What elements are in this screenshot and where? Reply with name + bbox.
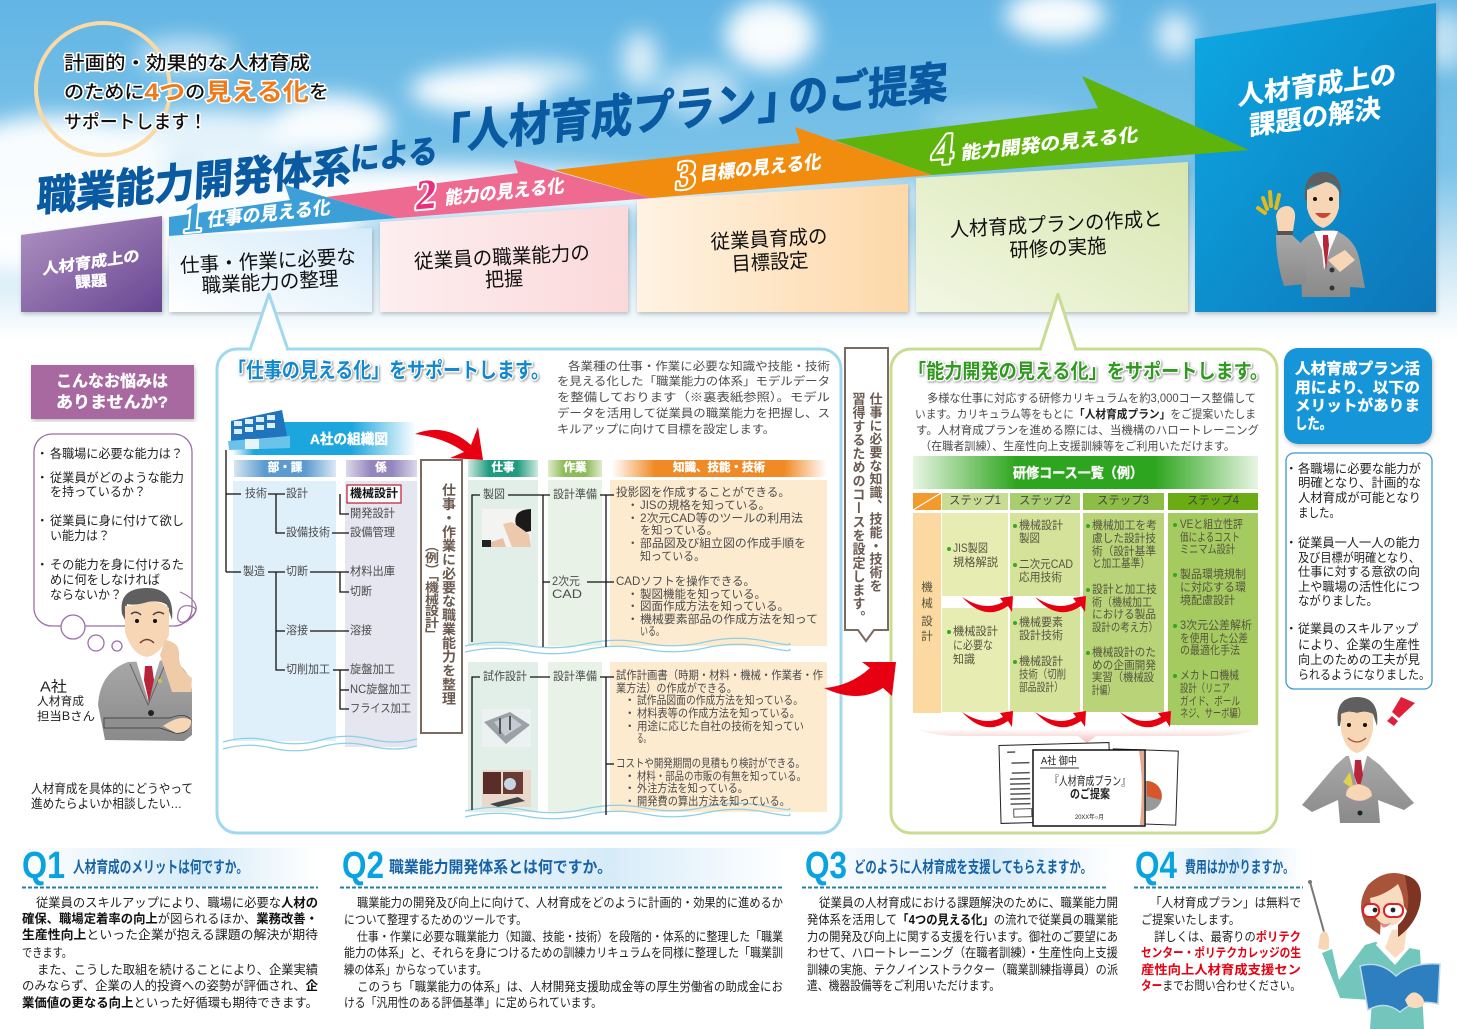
course table: ミニマム設計 — [1180, 542, 1235, 556]
course table: JIS製図 — [953, 541, 988, 555]
course table: 術（機械加工 — [1092, 595, 1152, 609]
panel: box 4: 人材育成プランの作成と — [949, 207, 1163, 242]
course table: 慮した設計技 — [1092, 531, 1156, 545]
panel: box 3: 従業員育成の — [710, 225, 828, 254]
section: Q1: 従業員のスキルアップにより、職場に必要な人材の — [36, 895, 318, 910]
table title band — [913, 456, 1258, 489]
course table: 技術（切削 — [1019, 667, 1066, 681]
org chart header: A社の組織図 — [310, 431, 388, 447]
step headers: ステップ2 — [1019, 494, 1071, 507]
panel: box 4 — [916, 162, 1188, 312]
text block: job visualization description: データを活用して従業員の職業能力を把握し、ス — [557, 406, 830, 420]
text block: capability description: います。カリキュラム等をもとに「人材育成プラン」をご提案いたしま — [915, 407, 1256, 421]
panel: merits list: ・ — [1285, 536, 1298, 550]
course table: 計 — [921, 629, 933, 643]
course table: 実習（機械設 — [1092, 670, 1154, 684]
panel: merits list: 人材育成が可能となり — [1298, 490, 1421, 505]
panel: right capability development — [891, 294, 1277, 833]
course table: 機 — [921, 581, 933, 594]
panel: box 1 — [169, 228, 372, 312]
step headers — [942, 493, 1258, 510]
skills table: ・ — [624, 708, 636, 720]
skills table: JISの規格を知っている。 — [640, 498, 770, 512]
skills table: CADソフトを操作できる。 — [616, 574, 755, 588]
section: Q2: このうち「職業能力の体系」は、人材開発支援助成金等の厚生労働省の助成金にお — [357, 979, 783, 994]
panel: box 4: 研修の実施 — [1009, 234, 1107, 263]
title: 人材育成プラン — [467, 77, 757, 157]
panel: issue box purple: 課題 — [74, 272, 108, 292]
skills table: 製図 — [483, 487, 505, 501]
column header: section — [346, 460, 417, 477]
skills table: を知っている。 — [640, 523, 718, 537]
panel: merits list: ・ — [1285, 622, 1298, 636]
photo: machine — [482, 709, 531, 747]
panel: merits list: 上や職場の活性化につ — [1298, 580, 1420, 594]
column header: job — [468, 460, 538, 477]
section: Q4: 産性向上人材育成支援セン — [1141, 962, 1301, 977]
skills table: 機械要素部品の作成方法を知って — [640, 612, 818, 626]
arrow: red curved table to course list — [824, 662, 896, 696]
photo: drafting — [482, 509, 531, 547]
callout: vertical course label with down arrow: 習得するためのコースを設定します。 — [850, 392, 866, 624]
course table: に必要な — [953, 639, 993, 652]
skills table: 投影図を作成することができる。 — [616, 485, 790, 499]
course table: 設計の考え方） — [1092, 620, 1158, 634]
panel: box 2: 把握 — [484, 267, 524, 292]
course table: 設計（リニア — [1180, 681, 1230, 695]
arrow: pink step 2: 能力の見える化 — [444, 176, 566, 208]
callout: vertical organize label: （例）「機械設計」 — [424, 540, 440, 640]
column header: job: 仕事 — [492, 460, 515, 474]
thought bubble: ・ — [36, 471, 49, 485]
panel: box 1: 職業能力の整理 — [201, 267, 339, 298]
course table: 製図 — [1019, 531, 1040, 545]
icon: worried man — [98, 588, 196, 741]
sky background with clouds — [0, 0, 1457, 340]
section: Q3: 発体系を活用して「4つの見える化」の流れで従業員の職業能 — [807, 912, 1118, 927]
course table: における製品 — [1092, 607, 1156, 621]
skills table: ・ — [624, 721, 636, 733]
arrow: red curved org to table — [415, 427, 483, 460]
course table: 機械設計 — [1019, 518, 1063, 532]
arrow: pink step 2 — [326, 160, 652, 220]
course table: 応用技術 — [1019, 570, 1062, 584]
section: Q4: ターまでお問い合わせください。 — [1141, 979, 1301, 993]
documents: training plan proposal — [999, 743, 1178, 826]
course table: 機械加工を考 — [1092, 518, 1157, 532]
skills table: ・ — [624, 771, 636, 783]
skills table: 設計準備 — [553, 487, 597, 501]
course table: 二次元CAD — [1019, 558, 1073, 571]
label: person name: 担当Bさん — [37, 709, 95, 723]
thought bubble: ・ — [36, 447, 49, 461]
org chart: 技術 — [245, 486, 267, 500]
panel: merits list — [1285, 453, 1432, 689]
column header: knowledge — [612, 460, 827, 477]
section: Q4: ご提案いたします。 — [1141, 912, 1240, 927]
thought bubble: ・ — [36, 558, 49, 572]
callout: vertical organize label — [421, 460, 462, 733]
org chart: 設備管理 — [350, 525, 395, 539]
title: 」 — [757, 73, 805, 129]
section: Q1: 人材育成のメリットは何ですか。 — [73, 858, 248, 876]
panel: merits list: ・ — [1285, 462, 1298, 476]
arrow: green step 4 — [834, 76, 1249, 175]
org chart: 切断 — [350, 585, 372, 598]
documents: training plan proposal: 『人材育成プラン』 — [1050, 773, 1130, 788]
panel: merits list: 仕事に対する意欲の向 — [1298, 564, 1420, 579]
panel: solution box: 課題の解決 — [1249, 93, 1381, 141]
course table: 規格解説 — [953, 555, 998, 569]
title: 職業能力開発体系 — [36, 143, 352, 221]
text block: job visualization description: を整備しております（※裏表紙参照）。モデル — [557, 390, 830, 404]
course table: 設計技術 — [1019, 628, 1063, 642]
thought bubble: ・ — [36, 514, 49, 528]
icon: woman with pointer and book — [1308, 873, 1440, 1029]
course table: めの企画開発 — [1092, 658, 1156, 672]
section: Q2: 職業能力開発体系とは何ですか。 — [389, 858, 612, 876]
section: Q3: Q3 — [805, 845, 847, 887]
column header: knowledge: 知識、技能・技術 — [673, 460, 765, 474]
skills table: る。 — [637, 733, 650, 745]
course table: メカトロ機械 — [1180, 668, 1239, 682]
text block: capability description: す。人材育成プランを進める際には、当機構のハロートレーニング — [916, 423, 1259, 437]
title — [36, 59, 949, 221]
title: による — [349, 133, 439, 177]
panel: box 3 — [637, 184, 908, 312]
skills table: 2次元 — [552, 575, 580, 588]
callout: vertical course label with down arrow — [845, 348, 888, 641]
course table: 計編） — [1092, 683, 1115, 697]
section: Q3: どのように人材育成を支援してもらえますか。 — [854, 858, 1092, 876]
section: Q3: わせて、ハロートレーニング（在職者訓練）・生産性向上支援 — [807, 945, 1118, 960]
org chart: 溶接 — [350, 624, 372, 637]
section: Q4: センター・ポリテクカレッジの生 — [1141, 945, 1301, 960]
thought bubble: を持っているか？ — [50, 484, 146, 499]
panel: solution box — [1195, 3, 1436, 312]
section: Q4: Q4 — [1135, 845, 1177, 887]
panel: merits list: ながりました。 — [1298, 593, 1378, 608]
panel: left heading worries: ありませんか? — [56, 394, 168, 412]
org chart: 材料出庫 — [350, 564, 395, 578]
course table: 機械設計のた — [1092, 645, 1156, 659]
section: Q3: 訓練の実施、テクノインストラクター（職業訓練指導員）の派 — [807, 962, 1118, 977]
skills table: コストや開発期間の見積もり検討ができる。 — [616, 756, 805, 770]
heading: job visualization: 「仕事の見える化」をサポートします。 — [228, 358, 549, 382]
lead text with orange circle: サポートします！ — [64, 112, 207, 132]
panel: merits heading: 人材育成プラン活 — [1295, 360, 1420, 378]
column header: department: 部・課 — [268, 460, 303, 474]
section: Q2: 仕事・作業に必要な職業能力（知識、技能・技術）を段階的・体系的に整理した「職業 — [357, 929, 783, 944]
skills table: 開発費の算出方法を知っている。 — [637, 794, 790, 808]
thought bubble: 各職場に必要な能力は？ — [50, 446, 183, 461]
course table: 機械設計 — [953, 624, 998, 638]
skills table: ・ — [627, 513, 638, 525]
section: Q1: 確保、職場定着率の向上が図られるほか、業務改善・ — [22, 911, 318, 926]
course table: 設計と加工技 — [1092, 582, 1157, 596]
skills table: 業方法）の作成ができる。 — [616, 681, 737, 695]
org chart: 開発設計 — [350, 506, 395, 520]
panel: solution box: 人材育成上の — [1238, 59, 1396, 111]
column header: department — [234, 460, 336, 477]
panel: merits list: られるようになりました。 — [1298, 668, 1430, 682]
skills table: CAD — [552, 589, 582, 601]
panel: box 1: 仕事・作業に必要な — [179, 245, 356, 278]
skills table: ・ — [627, 538, 638, 550]
section: Q2: 能力の体系」と、それらを身につけるための訓練カリキュラムを同様に整理した「職業訓 — [344, 945, 783, 960]
arrow: orange step 3 — [554, 127, 932, 198]
step headers: ステップ3 — [1097, 494, 1149, 507]
table title band: 研修コース一覧（例） — [1013, 465, 1143, 481]
course table: と加工基準） — [1092, 556, 1150, 570]
course table: 機械要素 — [1019, 615, 1063, 629]
skills table: 試作計画書（時期・材料・機械・作業者・作 — [616, 668, 823, 682]
course table: 機械設計 — [1019, 654, 1063, 668]
label: person name — [37, 678, 95, 723]
panel: merits list: 従業員のスキルアップ — [1298, 621, 1418, 636]
text block: capability description: （在職者訓練）、生産性向上支援訓練等をご利用いただけます。 — [920, 439, 1235, 453]
panel: merits list: 従業員一人一人の能力 — [1298, 535, 1420, 550]
icon: building — [228, 410, 290, 450]
arrow: blue step 1 — [169, 185, 398, 243]
section: Q1: できます。 — [22, 946, 72, 960]
skills table: ・ — [624, 695, 636, 707]
skills table: 設計準備 — [553, 669, 597, 683]
org chart: フライス加工 — [350, 702, 411, 715]
panel: merits heading: した。 — [1295, 416, 1332, 432]
skills table: 図面作成方法を知っている。 — [640, 599, 789, 613]
photo: cad screens — [482, 770, 531, 807]
documents: training plan proposal: のご提案 — [1070, 786, 1110, 801]
section: Q1: のみならず、企業の人的投資への姿勢が評価され、企 — [22, 978, 318, 993]
org chart: 製造 — [243, 564, 265, 578]
skills table: 用途に応じた自社の技術を知ってい — [637, 719, 804, 733]
arrow: blue step 1: 1 — [180, 193, 206, 243]
panel: merits list: 明確となり、計画的な — [1298, 475, 1421, 490]
org chart: 設備技術 — [286, 525, 330, 539]
panel: merits heading: 用により、以下の — [1295, 380, 1420, 396]
section: Q3: 力の開発及び向上に関する支援を行います。御社のご要望にあ — [807, 929, 1118, 944]
step headers: ステップ1 — [949, 494, 1001, 507]
panel: merits list: ました。 — [1298, 506, 1340, 520]
section: Q1 — [20, 845, 319, 1010]
thought bubble: い能力は？ — [50, 528, 110, 543]
arrow: orange step 3: 3 — [674, 152, 698, 198]
panel: issue box purple — [21, 216, 162, 312]
section: Q4: 「人材育成プラン」は無料で — [1150, 895, 1301, 910]
section: Q4 — [1134, 845, 1304, 993]
skills table: ・ — [624, 796, 636, 808]
panel: left heading worries — [31, 365, 194, 419]
section: Q1: また、こうした取組を続けることにより、企業実績 — [37, 962, 318, 977]
thought bubble: ならないか？ — [50, 588, 122, 602]
section: Q3: 遣、機器設備等をご利用いただけます。 — [807, 978, 1000, 993]
panel: left job visualization — [217, 294, 841, 833]
panel: box 2: 従業員の職業能力の — [413, 241, 590, 274]
panel: box 2 — [380, 206, 628, 312]
panel: merits list: 向上のための工夫が見 — [1298, 652, 1420, 667]
course table: 部品設計） — [1019, 680, 1063, 694]
text block: job visualization description: キルアップに向けて目標を設定します。 — [557, 422, 775, 436]
label: person name: 人材育成 — [37, 694, 85, 708]
text block: job visualization description: を見える化した「職業能力の体系」モデルデータ — [557, 374, 830, 388]
org chart: NC旋盤加工 — [350, 682, 411, 696]
panel: left heading worries: こんなお悩みは — [56, 372, 168, 390]
title: のご提案 — [787, 59, 949, 123]
title: 「 — [423, 109, 471, 165]
lead text with orange circle: 計画的・効果的な人材育成 — [64, 52, 310, 74]
skills table: 材料・部品の市販の有無を知っている。 — [637, 769, 806, 783]
course table: ネジ、サーボ編） — [1180, 707, 1246, 720]
documents: training plan proposal: A社 御中 — [1041, 754, 1077, 767]
org chart: 設計 — [286, 486, 308, 500]
thought bubble: 従業員に身に付けて欲し — [50, 513, 184, 528]
section: Q3 — [802, 845, 1118, 993]
skills table: ・ — [627, 500, 638, 512]
course table: を使用した公差 — [1180, 631, 1248, 645]
arrow: green step 4: 4 — [930, 123, 956, 175]
course table: ガイド、ボール — [1180, 695, 1240, 708]
column header: task: 作業 — [564, 460, 587, 474]
course table: 製品環境規制 — [1180, 567, 1246, 581]
skills table: 外注方法を知っている。 — [637, 781, 748, 795]
section: Q1: Q1 — [22, 845, 65, 887]
section: Q2: 練の体系」からなっています。 — [344, 963, 487, 977]
skills table: 試作設計 — [483, 669, 527, 683]
column header: task — [548, 460, 602, 477]
course table: 3次元公差解析 — [1180, 618, 1252, 632]
thought bubble — [34, 434, 192, 651]
lead text with orange circle — [36, 23, 329, 155]
panel: merits heading — [1284, 348, 1432, 444]
org chart: 切削加工 — [286, 662, 330, 676]
thought bubble: その能力を身に付けるた — [50, 557, 184, 572]
column header: section: 係 — [375, 460, 387, 474]
panel: merits list: により、企業の生産性 — [1298, 637, 1420, 652]
section: Q2: 職業能力の開発及び向上に向けて、人材育成をどのように計画的・効果的に進めるか — [357, 895, 783, 910]
icon: proud man — [1258, 172, 1365, 297]
org chart header — [232, 422, 416, 455]
arrow: blue step 1: 仕事の見える化 — [206, 197, 332, 231]
arrow: green step 4: 能力開発の見える化 — [960, 125, 1140, 163]
heading: capability development: 「能力開発の見える化」をサポートします。 — [908, 360, 1268, 383]
section: Q3: 従業員の人材育成における課題解決のために、職業能力開 — [819, 895, 1118, 910]
section: Q4: 費用はかかりますか。 — [1185, 858, 1294, 876]
text block: capability description — [915, 391, 1259, 453]
documents: training plan proposal: 20XX年○月 — [1075, 813, 1104, 821]
skills table: 試作品図面の作成方法を知っている。 — [637, 693, 803, 707]
skills table: ・ — [627, 614, 638, 626]
org chart: 切断 — [286, 565, 308, 578]
text block: job visualization description — [557, 359, 831, 436]
panel: issue box purple: 人材育成上の — [42, 247, 140, 278]
skills table: ・ — [627, 601, 638, 613]
course table: の最適化手法 — [1180, 643, 1240, 657]
arrow: orange step 3: 目標の見える化 — [699, 152, 823, 184]
section: Q2: について整理するためのツールです。 — [344, 913, 527, 927]
skills table: ・ — [627, 589, 638, 601]
skills table: 知っている。 — [640, 549, 705, 563]
section: Q2 — [340, 845, 785, 1010]
step headers: ステップ4 — [1187, 494, 1240, 507]
skills table — [465, 460, 827, 819]
section: Q4: 詳しくは、最寄りのポリテク — [1154, 929, 1301, 944]
skills table: 製図機能を知っている。 — [640, 587, 766, 601]
section: Q1: 生産性向上といった企業が抱える課題の解決が期待 — [22, 927, 319, 942]
section: Q1: 業価値の更なる向上といった好循環も期待できます。 — [22, 995, 318, 1010]
course table: に対応する環 — [1180, 581, 1246, 594]
panel: merits heading: メリットがありま — [1295, 396, 1420, 414]
course table: 知識 — [953, 652, 975, 666]
course table: 境配慮設計 — [1180, 593, 1235, 607]
section: Q2: Q2 — [342, 845, 384, 887]
thought bubble: 従業員がどのような能力 — [50, 470, 184, 485]
thought bubble: めに何をしなければ — [50, 572, 160, 587]
panel: merits list: 各職場に必要な能力が — [1298, 461, 1421, 476]
course table: 価によるコスト — [1180, 531, 1240, 544]
callout: vertical course label with down arrow: 仕事に必要な知識、技能・技術を — [868, 391, 882, 592]
arrow: pink step 2: 2 — [413, 170, 439, 220]
skills table: いる。 — [640, 626, 664, 638]
course table — [913, 456, 1258, 743]
course table: 械 — [921, 596, 933, 610]
lead text with orange circle: のために 4つの見える化 を — [64, 78, 329, 106]
panel: box 3: 目標設定 — [731, 249, 809, 276]
panel: merits list: 及び目標が明確となり、 — [1298, 550, 1420, 565]
skills table: 部品図及び組立図の作成手順を — [640, 536, 806, 550]
org chart: 機械設計 — [350, 486, 399, 500]
org chart — [223, 410, 417, 751]
text block: capability description: 多様な仕事に対応する研修カリキュラムを約3,000コース整備して — [927, 391, 1256, 405]
course table: 設 — [921, 615, 933, 628]
course table: VEと組立性評 — [1180, 517, 1243, 531]
callout: vertical organize label: 仕事・作業に必要な職業能力を整理 — [441, 482, 457, 705]
text block: consultation wish: 進めたらよいか相談したい… — [31, 797, 182, 811]
org chart: 旋盤加工 — [350, 662, 395, 676]
skills table: 材料表等の作成方法を知っている。 — [637, 706, 800, 720]
skills table: 2次元CAD等のツールの利用法 — [640, 511, 804, 525]
text block: job visualization description: 各業種の仕事・作業に必要な知識や技能・技術 — [568, 359, 831, 373]
label: person name: A社 — [40, 678, 67, 696]
section: Q2: ける「汎用性のある評価基準」に定められています。 — [344, 995, 602, 1010]
org chart: 溶接 — [286, 624, 308, 637]
icon: man with exclamation — [1302, 697, 1415, 823]
skills table: ・ — [624, 783, 636, 795]
text block: consultation wish — [31, 781, 193, 811]
course table: 術（設計基準 — [1092, 544, 1156, 558]
text block: consultation wish: 人材育成を具体的にどうやって — [31, 781, 193, 796]
